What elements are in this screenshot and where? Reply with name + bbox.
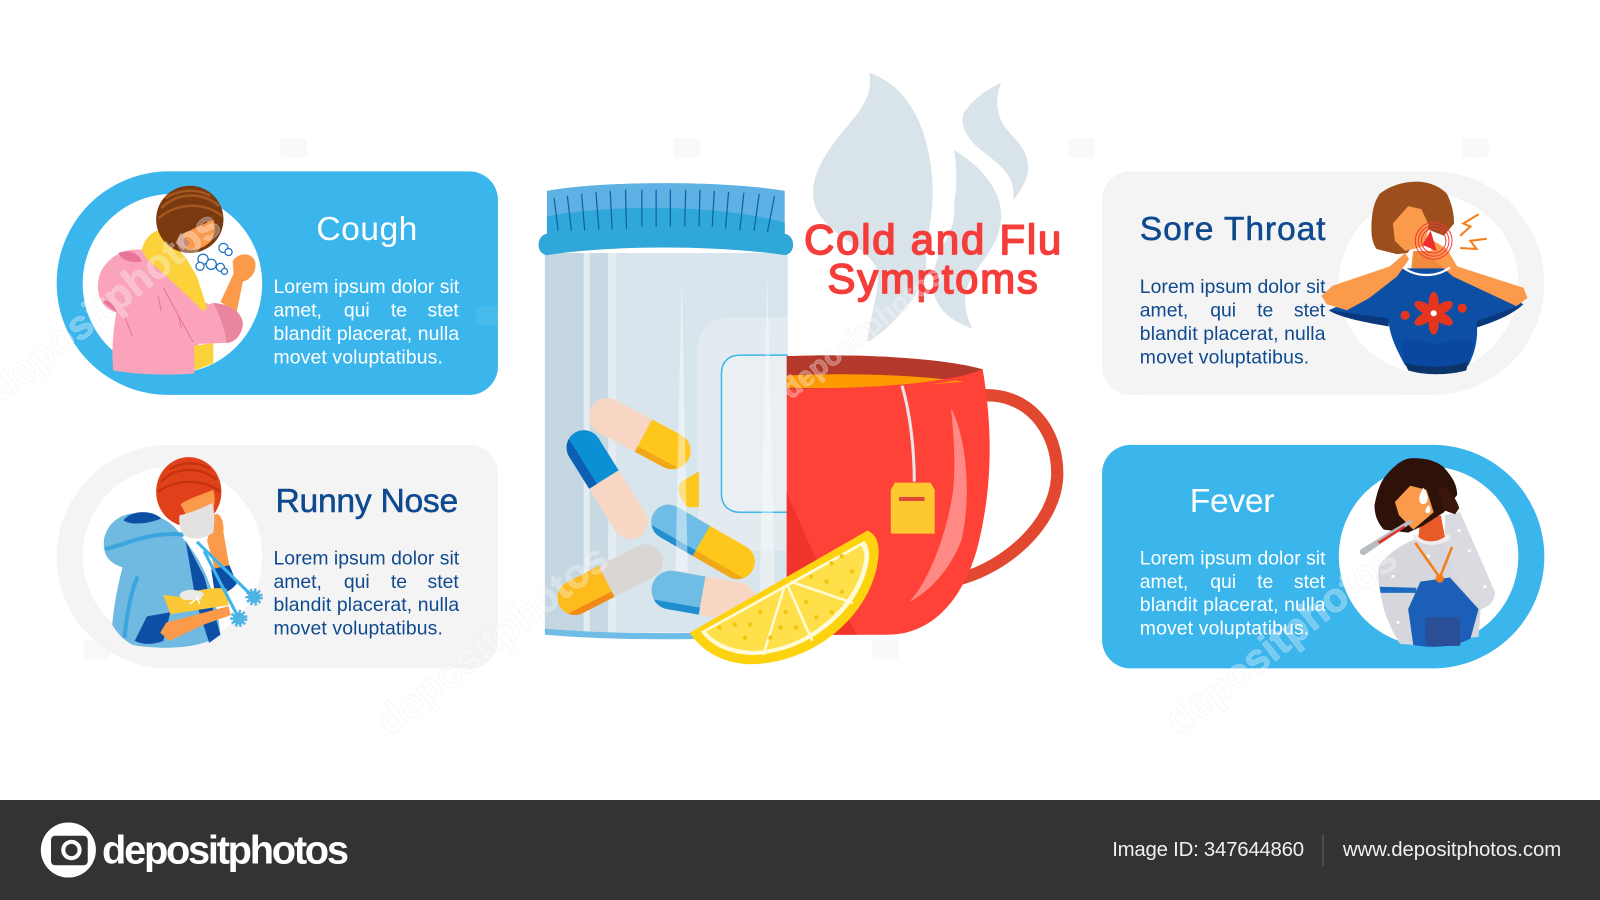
illustration: woman with fever [1360,458,1495,647]
illustration: medicine jar [539,183,793,639]
body text: runny nose: stet [428,571,459,593]
body text: cough: blandit placerat, nulla [273,323,459,345]
body text: sore throat: amet, [1140,299,1188,321]
panel: fever [1102,445,1544,668]
title: Symptoms [828,255,1038,302]
body text: sore throat: qui [1210,299,1236,321]
body text: cough: movet voluptatibus. [273,346,443,368]
capsule: blue and peach [560,424,654,546]
body text: runny nose: amet, [273,571,322,593]
body text: fever: stet [1294,571,1326,593]
body text: fever [1140,547,1326,640]
body text: runny nose: movet voluptatibus. [273,618,443,640]
capsule: yellow fragment [679,471,699,507]
body text: cough: te [391,299,407,321]
body text: runny nose: Lorem ipsum dolor sit [273,547,460,569]
steam [813,72,1028,342]
logo: wordmark: depositphotos [102,828,349,872]
watermarks [0,201,1406,744]
panel: cough [57,171,498,395]
title [804,216,1061,302]
body text: runny nose: qui [344,571,370,593]
watermarks: depositphotos [367,535,617,744]
body text: sore throat: stet [1294,299,1326,321]
logo: camera badge [41,822,96,878]
heading: Fever: Fever [1190,483,1274,520]
body text: cough: stet [428,299,459,321]
body text: runny nose [273,547,460,640]
illustration: tea mug [787,355,1057,635]
title: Cold and Flu [804,216,1061,263]
jar lid [539,183,793,255]
body text: runny nose: blandit placerat, nulla [273,594,459,616]
body text: cough [273,276,460,368]
body text: fever: te [1257,571,1273,593]
panel: sore throat [1102,171,1544,395]
heading: Sore Throat: Sore Throat [1140,211,1326,248]
body text: sore throat: blandit placerat, nulla [1140,323,1326,345]
capsule: peach and yellow [583,392,697,476]
body text: fever: blandit placerat, nulla [1140,594,1326,616]
illustration: lemon slice [690,531,879,664]
heading: Cough: Cough [316,211,417,248]
body text: sore throat: Lorem ipsum dolor sit [1140,276,1326,298]
panel: runny nose [57,445,498,668]
body text: sore throat [1140,276,1326,368]
body text: sore throat: te [1257,299,1273,321]
illustration: woman with sore throat [1321,182,1528,374]
illustration: woman blowing nose [104,457,260,648]
website: www.depositphotos.com [1342,839,1561,861]
watermarks: depositphotos [775,259,950,406]
body text: fever: qui [1210,571,1236,593]
image id: Image ID: 347644860 [1112,839,1304,861]
body text: fever: amet, [1140,571,1188,593]
body text: runny nose: te [391,571,407,593]
watermarks: depositphotos [1156,535,1406,744]
body text: fever: Lorem ipsum dolor sit [1140,547,1326,569]
footer bar [0,800,1600,900]
body text: fever: movet voluptatibus. [1140,618,1309,640]
mug handle [961,395,1057,579]
heading: Runny Nose: Runny Nose [276,483,458,520]
tea bag tag [891,483,935,534]
body text: cough: qui [344,299,370,321]
body text: cough: amet, [273,299,322,321]
capsule: blue and yellow [645,498,761,585]
body text: cough: Lorem ipsum dolor sit [273,276,460,298]
body text: sore throat: movet voluptatibus. [1140,346,1309,368]
capsule: yellow and grey [551,538,669,621]
illustration: coughing woman [98,186,255,374]
capsule: blue and peach lower [648,568,760,624]
